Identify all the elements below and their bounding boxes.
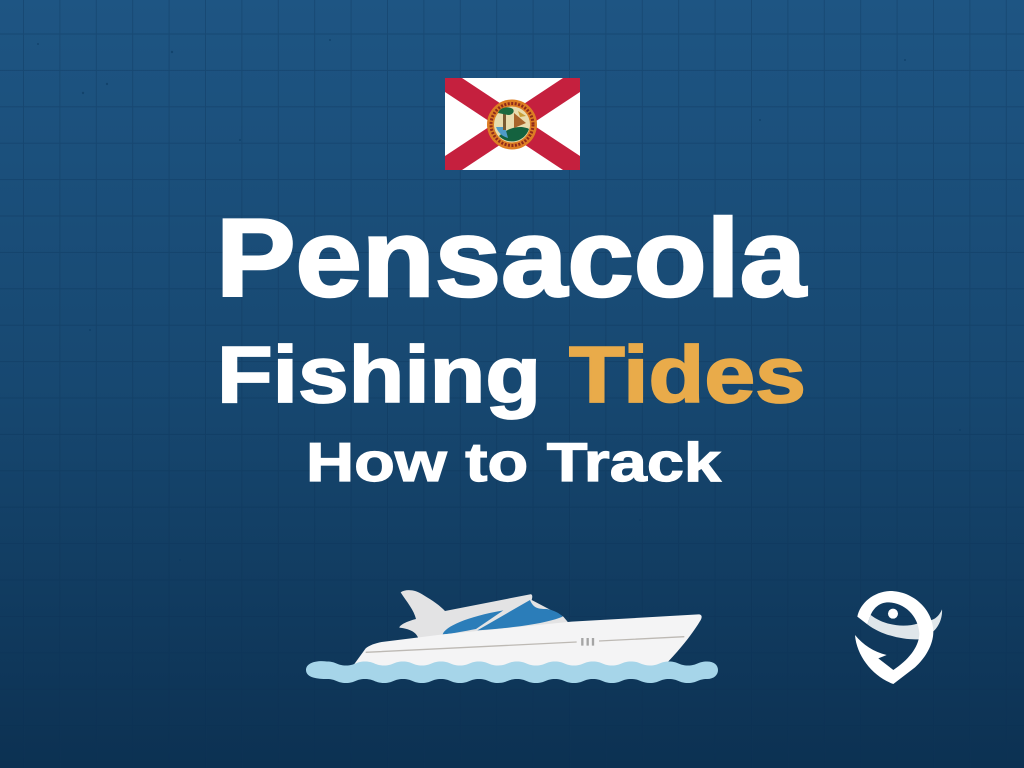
subheading: How to Track: How to Track bbox=[306, 431, 721, 493]
waves bbox=[306, 661, 718, 683]
icon: fish hook logo bbox=[855, 591, 942, 684]
title: Pensacola: Pensacola bbox=[216, 197, 807, 320]
icon: motor yacht on waves bbox=[306, 590, 718, 683]
heading: Fishing Tides bbox=[217, 330, 806, 419]
heading: Fishing Tides: Tides bbox=[569, 330, 806, 419]
fish body and hook bbox=[855, 591, 933, 684]
hull bbox=[350, 614, 702, 670]
fish tail band bbox=[867, 609, 942, 639]
heading: Fishing Tides: Fishing bbox=[217, 330, 541, 419]
radar arch and flybridge bbox=[399, 590, 572, 643]
icon: Florida state flag bbox=[445, 78, 580, 170]
fish eye bbox=[888, 609, 898, 619]
